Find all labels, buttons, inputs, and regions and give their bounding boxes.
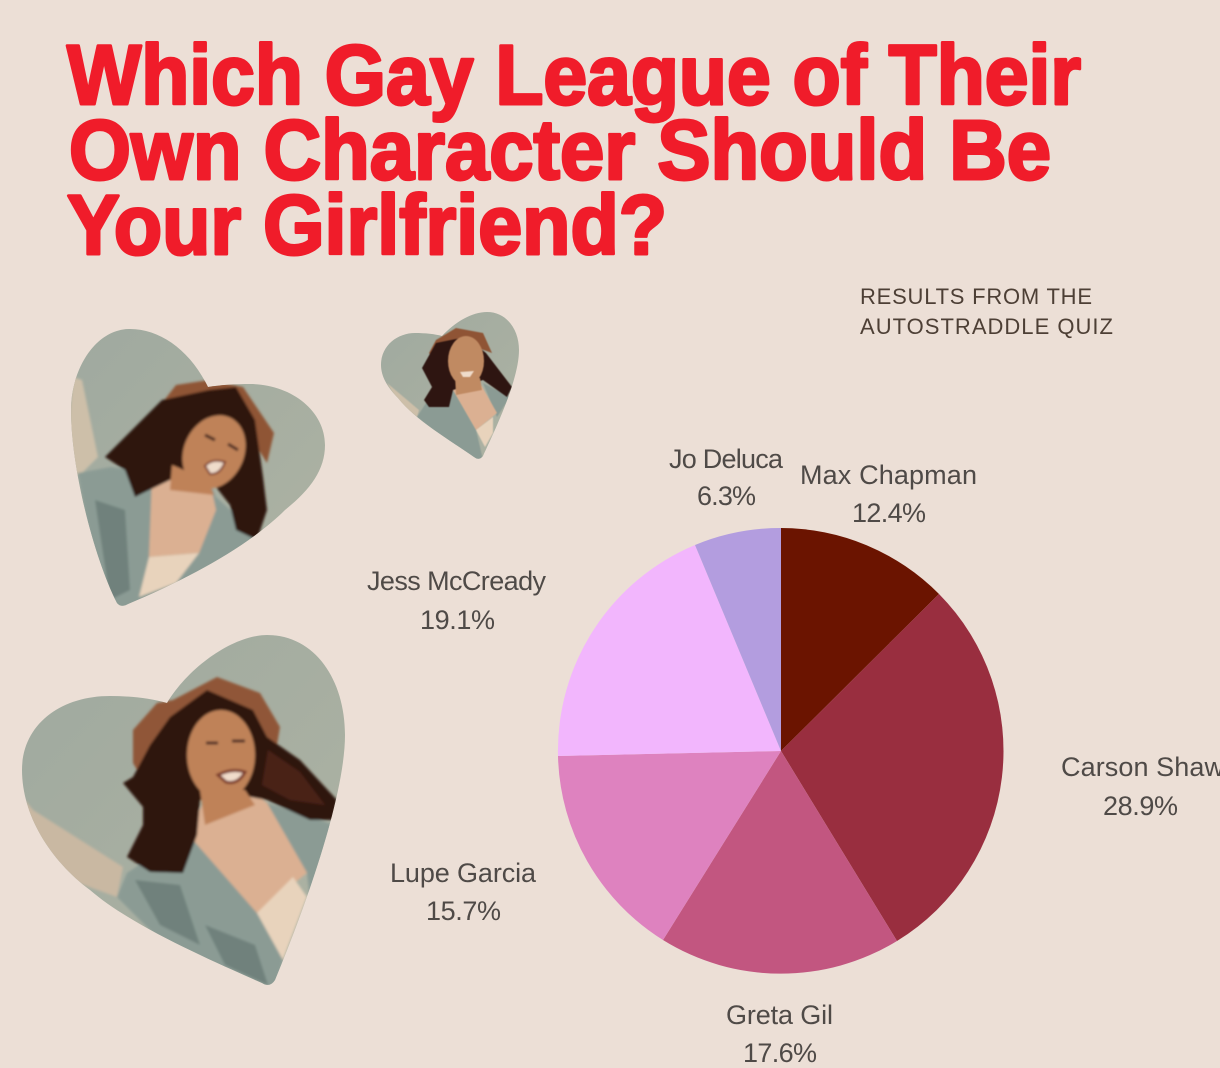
- slice: Max Chapman: [781, 528, 939, 751]
- label: Jo Deluca: [669, 444, 784, 511]
- slice: Greta Gil: [663, 751, 897, 974]
- heart photo: large bottom: [15, 630, 350, 995]
- title: [67, 28, 1081, 272]
- slice: Jess McCready: [558, 545, 781, 756]
- label: Lupe Garcia: Lupe Garcia: [390, 858, 537, 888]
- label: Greta Gil: [726, 1000, 833, 1068]
- label: Lupe Garcia: [390, 858, 537, 926]
- label: Jo Deluca: 6.3%: [697, 481, 756, 511]
- heart photo: top left: [71, 329, 325, 606]
- label: Max Chapman: Max Chapman: [800, 460, 977, 490]
- label: Jo Deluca: Jo Deluca: [669, 444, 784, 474]
- label: Greta Gil: 17.6%: [743, 1038, 817, 1068]
- slice: Lupe Garcia: [558, 751, 781, 940]
- subtitle: quiz source: AUTOSTRADDLE QUIZ: [860, 314, 1113, 339]
- subtitle: quiz source: RESULTS FROM THE: [860, 284, 1092, 309]
- label: Max Chapman: 12.4%: [852, 498, 926, 528]
- label: Jess McCready: Jess McCready: [367, 566, 546, 596]
- label: Carson Shaw: [1061, 752, 1220, 821]
- label: Carson Shaw: 28.9%: [1103, 791, 1178, 821]
- pie chart: [558, 528, 1003, 974]
- label: Greta Gil: Greta Gil: [726, 1000, 833, 1030]
- title: Your Girlfriend?: [67, 178, 667, 272]
- subtitle: quiz source: [860, 284, 1113, 339]
- title: Which Gay League of Their: [67, 28, 1081, 122]
- label: Jess McCready: 19.1%: [420, 605, 495, 635]
- slice: Jo Deluca: [695, 528, 781, 751]
- label: Jess McCready: [367, 566, 546, 635]
- label: Carson Shaw: Carson Shaw: [1061, 752, 1220, 782]
- title: Own Character Should Be: [69, 103, 1051, 197]
- label: Max Chapman: [800, 460, 977, 528]
- slice: Carson Shaw: [781, 594, 1003, 941]
- heart photo: small top: [381, 312, 519, 459]
- label: Lupe Garcia: 15.7%: [426, 896, 501, 926]
